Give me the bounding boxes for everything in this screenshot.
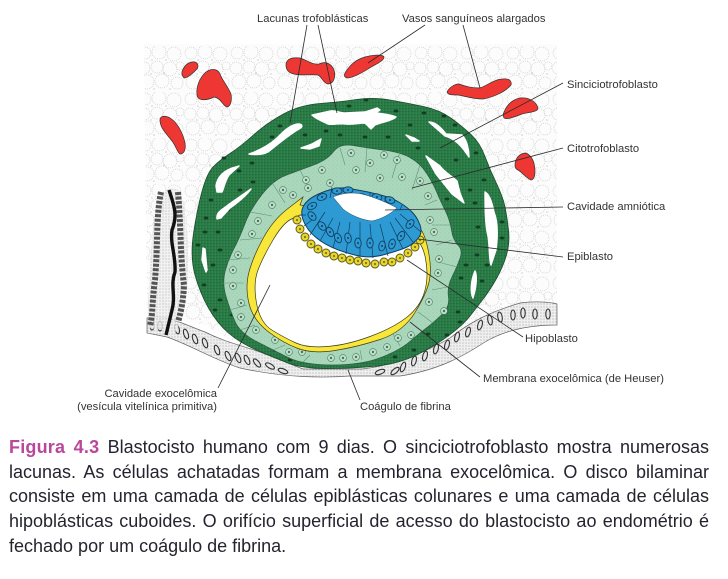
figure caption: consiste em uma camada de células epiblásticas colunares e uma camada de células <box>9 486 709 506</box>
cytotrophoblast <box>222 145 461 365</box>
exocoelomic cavity <box>255 215 427 347</box>
figure caption <box>9 437 709 556</box>
trophoblastic lacunae <box>202 108 497 298</box>
exocoelomic membrane (yellow) <box>247 197 430 352</box>
endometrial stroma background <box>144 44 557 372</box>
label: Sinciciotrofoblasto: Sinciciotrofoblasto <box>567 79 658 91</box>
figure caption: hipoblásticas cuboides. O orifício superficial de acesso do blastocisto ao endométrio é <box>9 511 709 531</box>
uterine gland with dark lumen <box>148 188 188 335</box>
label: Citotrofoblasto: Citotrofoblasto <box>567 143 639 155</box>
label: Vasos sanguíneos alargados: Vasos sanguíneos alargados <box>402 13 546 25</box>
uterine epithelium strip <box>147 302 557 377</box>
label: Cavidade amniótica: Cavidade amniótica <box>567 201 666 213</box>
label: Cavidade exocelômica: Cavidade exocelômica <box>104 388 218 400</box>
label: Epiblasto: Epiblasto <box>567 251 613 263</box>
leader lines <box>218 25 563 400</box>
figure caption: fechado por um coágulo de fibrina. <box>9 536 286 556</box>
label: Hipoblasto: Hipoblasto <box>525 333 578 345</box>
maternal blood vessels (red) <box>160 55 538 180</box>
diagram: human blastocyst at 9 days <box>77 13 666 413</box>
label: Membrana exocelômica: Membrana exocelômica (de Heuser) <box>483 373 664 385</box>
epiblast columnar cells <box>300 187 421 258</box>
label: Coágulo de fibrina: Coágulo de fibrina <box>360 401 452 413</box>
figure caption: lacunas. As células achatadas formam a membrana exocelômica. O disco bilaminar <box>9 462 709 482</box>
figure caption: Figura 4.3 Blastocisto humano com 9 dias. O sinciciotrofoblasto mostra numerosas <box>9 437 709 457</box>
syncytiotrophoblast <box>192 98 509 369</box>
amniotic cavity <box>333 193 397 221</box>
label: vesícula vitelínica primitiva: (vesícula vitelínica primitiva) <box>77 401 217 413</box>
hypoblast cuboidal cells <box>293 216 424 268</box>
label: Lacunas trofoblásticas: Lacunas trofoblásticas <box>257 13 369 25</box>
